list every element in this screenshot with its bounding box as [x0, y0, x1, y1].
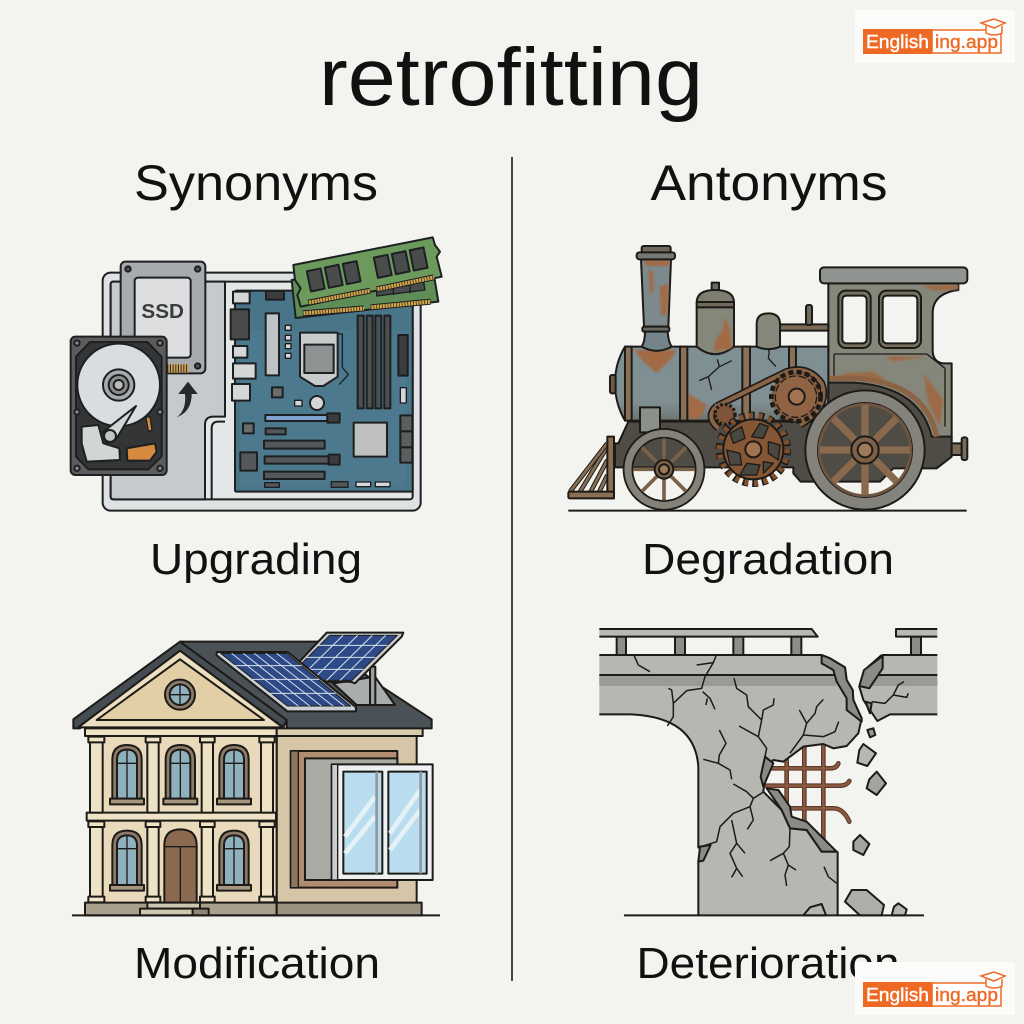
entablature	[85, 728, 277, 736]
left wall	[90, 735, 277, 903]
label: modification: Modification	[134, 939, 380, 988]
logo: top right	[855, 10, 1015, 63]
motherboard	[231, 291, 413, 492]
bridge pier and deck	[599, 655, 862, 915]
illustration: crumbling bridge	[599, 629, 937, 915]
ssd label: SSD	[141, 300, 184, 323]
roof	[73, 642, 432, 728]
label: deterioration: Deterioration	[636, 939, 900, 988]
title: retrofitting	[319, 32, 703, 123]
center divider	[511, 157, 513, 981]
big drive wheel	[812, 397, 918, 503]
old window opening	[291, 751, 397, 888]
gable pediment	[78, 651, 283, 727]
belt and gears	[711, 370, 823, 483]
logo: bottom right: English	[866, 985, 929, 1005]
logo: top right: English	[866, 32, 929, 52]
door	[164, 829, 197, 903]
logo: bottom right	[855, 962, 1015, 1015]
bridge railing	[599, 629, 937, 655]
boiler	[610, 330, 828, 421]
hard disk drive	[71, 337, 167, 475]
cab	[820, 267, 967, 438]
illustration: rusty locomotive	[568, 246, 967, 511]
label: upgrading: Upgrading	[150, 535, 362, 584]
cracks	[634, 656, 908, 886]
right wall	[277, 735, 417, 903]
chimney	[637, 246, 675, 351]
ground line	[624, 912, 924, 918]
front wheel	[628, 433, 700, 505]
columns	[88, 737, 275, 903]
valve and pipe	[757, 305, 828, 349]
falling debris	[853, 728, 886, 855]
base and steps	[85, 903, 422, 915]
illustration: retrofitted house	[72, 633, 440, 915]
arrow: upgrade	[177, 382, 198, 417]
rubble	[803, 890, 907, 915]
ram sticks	[292, 237, 442, 318]
logo: bottom right: ing.app	[935, 985, 998, 1005]
solar panel: on roof	[217, 652, 356, 711]
right deck section	[859, 655, 937, 721]
chassis	[615, 378, 967, 482]
right cornice	[277, 728, 423, 736]
ssd drive	[121, 262, 205, 373]
solar panel: raised	[280, 633, 403, 705]
heading: synonyms: Synonyms	[134, 155, 378, 211]
ground line	[72, 912, 440, 918]
new window	[332, 764, 433, 880]
cowcatcher	[568, 437, 614, 498]
mid band	[87, 813, 276, 821]
steam dome	[697, 283, 734, 354]
computer case	[103, 273, 421, 511]
rebar	[767, 744, 849, 852]
illustration: computer upgrade	[71, 237, 442, 511]
label: degradation: Degradation	[642, 535, 894, 584]
arched windows	[110, 745, 251, 891]
logo: top right: ing.app	[935, 32, 998, 52]
roof opening and panel support	[333, 677, 395, 705]
ground line	[568, 508, 967, 514]
heading: antonyms: Antonyms	[650, 155, 888, 211]
